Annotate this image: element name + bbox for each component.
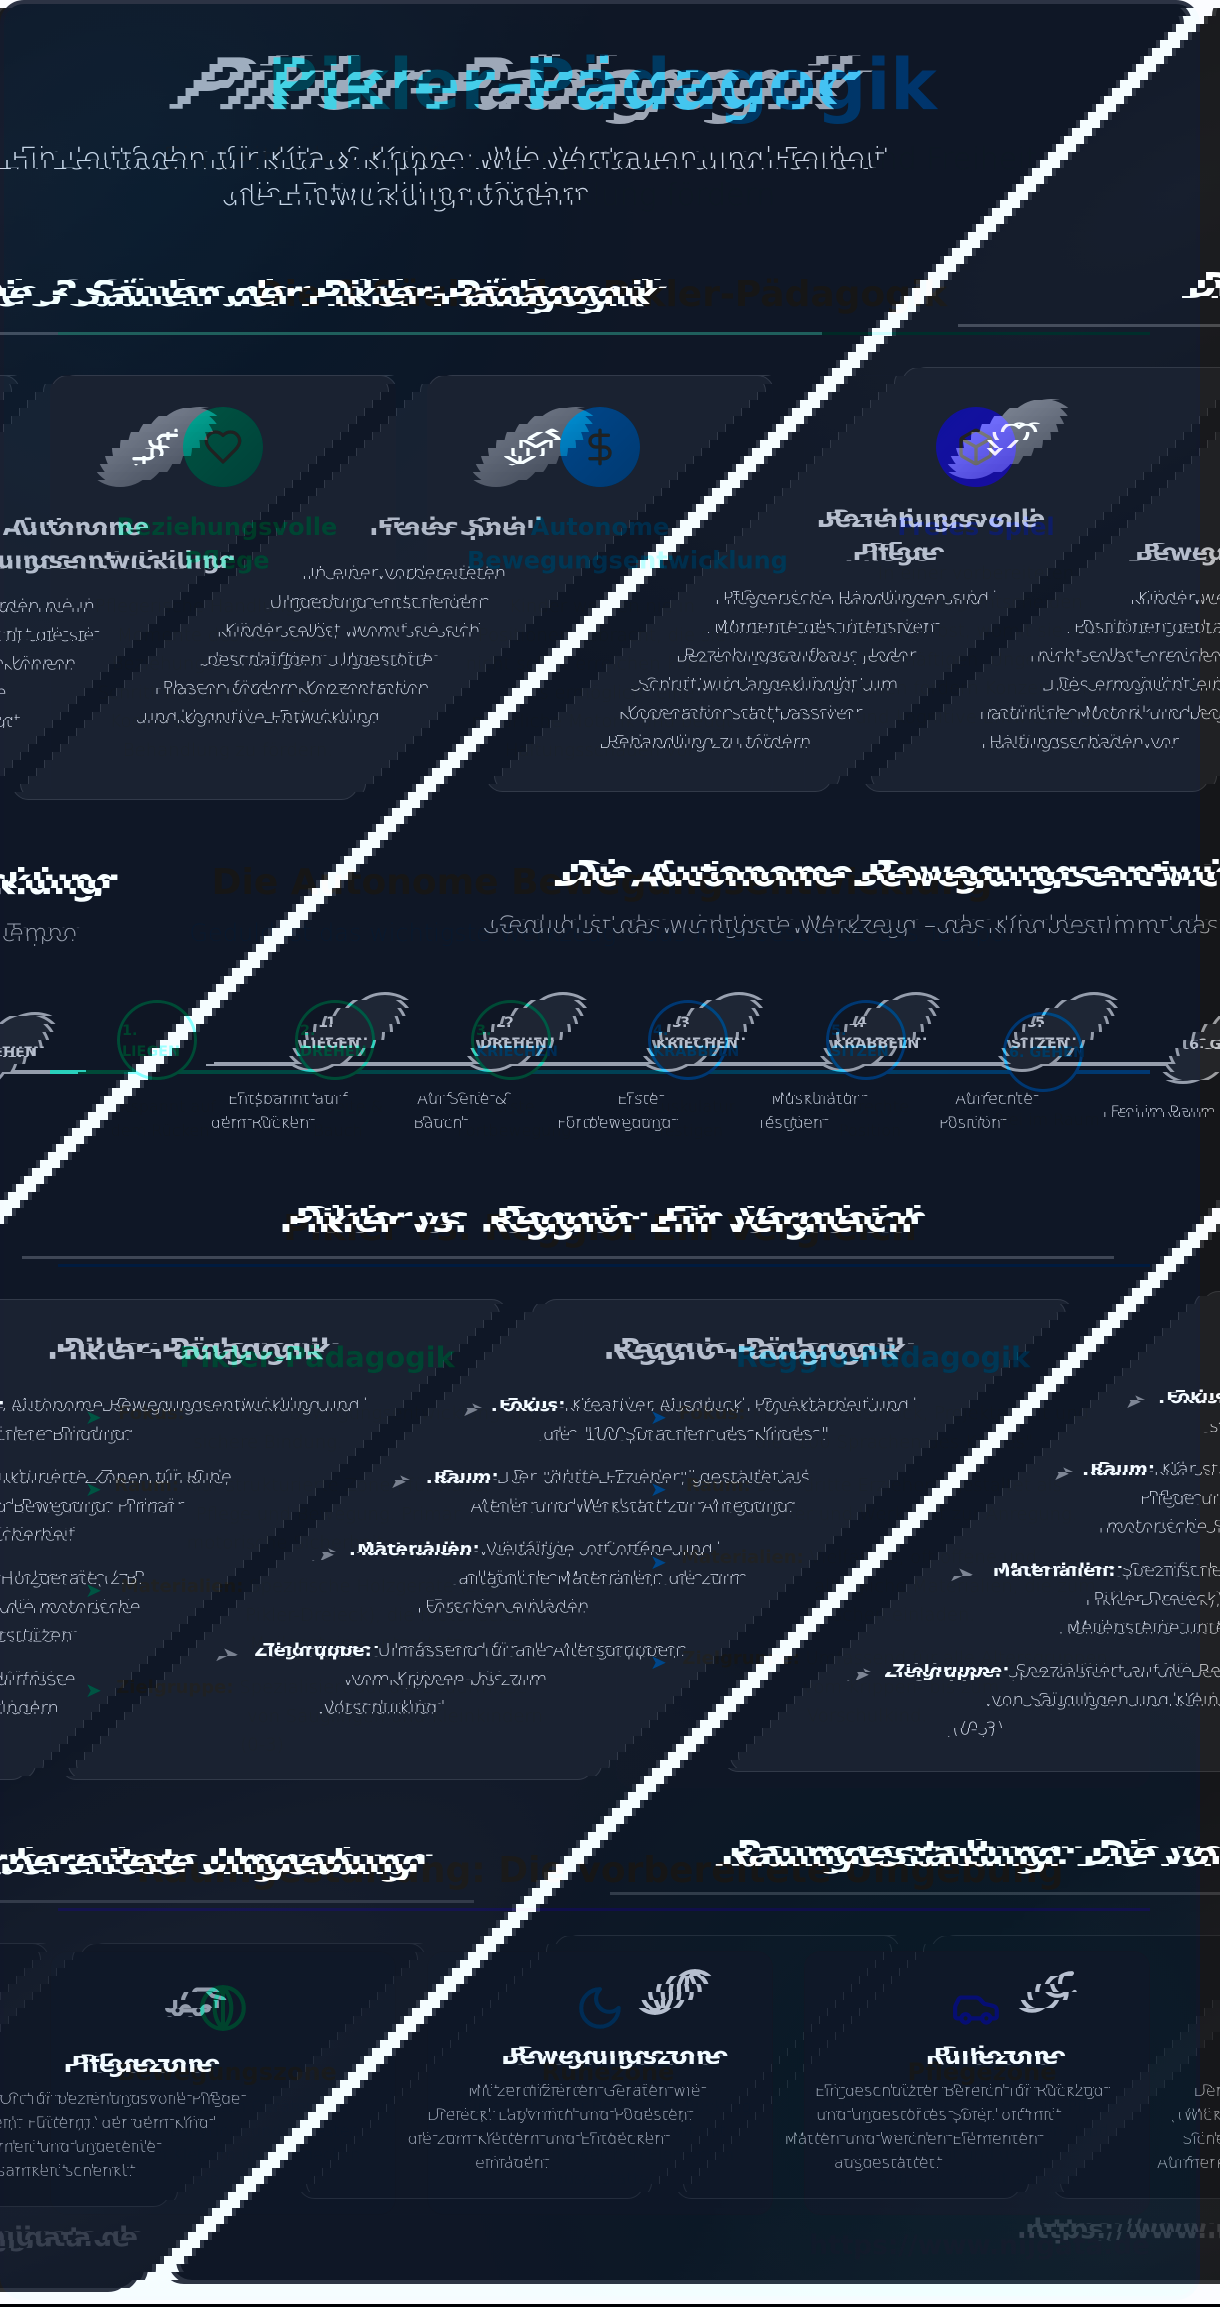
card text: Dies ermöglicht eine xyxy=(509,682,695,703)
card text: Haltungsschäden vor. xyxy=(505,740,699,761)
zone text: einladen. xyxy=(195,2169,269,2188)
heading: Vergleich xyxy=(58,1208,1150,1267)
icon: changing table xyxy=(955,1998,997,2023)
step 4: festigen xyxy=(659,1121,723,1140)
panel: Freies Spiel xyxy=(804,376,1150,800)
step 6: 6. GEHEN xyxy=(1009,1045,1085,1061)
list: Pikler xyxy=(85,1403,543,1756)
list: Pikler: sichere Bindung. xyxy=(193,1432,343,1453)
step 5: Position xyxy=(839,1121,901,1140)
panel: Autonome Bewegungsentwicklung xyxy=(428,376,788,800)
step 4: Muskulatur xyxy=(647,1097,736,1116)
list: Reggio: ➤ xyxy=(650,1477,667,1501)
list: Reggio xyxy=(650,1403,1114,1727)
zone text: Sicherheit und ungeteilte xyxy=(878,2145,1080,2164)
card heading xyxy=(117,513,337,575)
heading: Säulen xyxy=(58,274,1150,335)
card text xyxy=(466,596,738,761)
list: Pikler: ➤ xyxy=(85,1578,102,1602)
card text: und kognitive Entwicklung. xyxy=(855,707,1097,728)
icon: box xyxy=(936,407,1016,487)
card heading xyxy=(467,513,788,575)
zone text: die zum Klettern und Entdecken xyxy=(104,2145,360,2164)
list: Pikler: Materialien: Spezifische Holzgeräte (z.B. xyxy=(121,1576,499,1597)
card heading: Autonome xyxy=(531,513,669,541)
comparison heading: Reggio-Pädagogik xyxy=(736,1340,1031,1374)
zone text: Der Ort für beziehungsvolle Pflege xyxy=(842,2097,1116,2116)
list: Reggio: Forschen einladen. xyxy=(805,1605,975,1626)
step 6 xyxy=(994,1014,1100,1129)
list: Pikler: Fokus: Autonome Bewegungsentwicklung und xyxy=(118,1403,540,1424)
step 1: dem Rücken xyxy=(111,1121,209,1140)
list: Pikler: Zielgruppe: Spezialisiert auf die Bedürfnisse xyxy=(116,1677,528,1698)
heading: Bewegungsentwicklung: Die Autonome Bewegungsentwicklung xyxy=(212,862,992,903)
card heading: Bewegungsentwicklung xyxy=(467,547,788,575)
card text xyxy=(95,596,361,761)
list: Reggio: vom Krippen- bis zum xyxy=(803,1677,999,1698)
heading: Raumgestaltung: Raumgestaltung: Die vorbereitete Umgebung xyxy=(136,1850,1064,1891)
heading: Vergleich: Pikler vs. Reggio: Ein Vergleich xyxy=(283,1208,917,1249)
zone text: Aufmerksamkeit schenkt. xyxy=(877,2169,1081,2188)
list: Reggio: Zielgruppe: Umfassend für alle Altersgruppen, xyxy=(682,1648,1114,1669)
list: Reggio: ➤ xyxy=(650,1650,667,1674)
step 3 xyxy=(457,1002,571,1140)
list: Pikler: Pflege und Bewegung. Primär xyxy=(196,1504,461,1525)
step 1: 1. xyxy=(122,1023,137,1039)
list: Pikler: ➤ xyxy=(85,1477,102,1501)
zone text: Matten und weichen Elementen xyxy=(480,2145,734,2164)
step 4 xyxy=(647,1002,739,1140)
zone text: Ein geschützter Bereich für Rückzug xyxy=(463,2097,751,2116)
card text: Positionen gebracht, die sie xyxy=(478,625,726,646)
step 2: Bauch xyxy=(313,1121,363,1140)
zone text: ausgestattet. xyxy=(554,2169,660,2188)
list: Reggio: die "100 Sprachen des Kindes". xyxy=(755,1432,1039,1453)
heading: Raumgestaltung xyxy=(58,1850,1150,1911)
list: Pikler: (0-3) xyxy=(240,1735,284,1756)
card text xyxy=(842,563,1110,728)
footer url: https://www.nijgata.de xyxy=(809,2230,1150,2261)
list: Pikler: von Säuglingen und Kleinkindern xyxy=(247,1706,543,1727)
step 5: 5. xyxy=(831,1023,846,1039)
card text: Kinder werden nie in xyxy=(509,596,695,617)
card text: nicht selbst erreichen können. xyxy=(466,654,738,675)
list: Reggio: ➤ xyxy=(650,1550,667,1574)
step 1 xyxy=(104,1002,216,1140)
list: Reggio: Atelier und Werkstatt zur Anregung. xyxy=(754,1504,1078,1525)
card text: Phasen fördern Konzentration xyxy=(842,678,1110,699)
list: Pikler: ➤ xyxy=(85,1405,102,1429)
panel: Ruhezone xyxy=(428,1952,772,2214)
zone title: Ruhezone xyxy=(542,2058,674,2086)
panel: Beziehungsvolle Pflege xyxy=(50,376,396,800)
list: Pikler: Raum: Klar strukturierte Zonen für Ruhe, xyxy=(114,1475,490,1496)
icon: moon xyxy=(581,1989,619,2027)
zone title: Bewegungszone xyxy=(117,2058,337,2086)
card text: Beziehungsaufbaus. Jeder xyxy=(112,654,345,675)
list: Reggio: Raum: Der "dritte Erzieher", gestaltet als xyxy=(686,1475,1062,1496)
card text: In einer vorbereiteten xyxy=(878,563,1074,584)
subtitle xyxy=(163,142,1037,213)
list: Reggio: alltägliche Materialien, die zum xyxy=(814,1576,1096,1597)
card heading: Beziehungsvolle xyxy=(117,513,337,541)
zone text xyxy=(842,2097,1116,2188)
step 3: Fortbewegung xyxy=(457,1121,571,1140)
list: Reggio: ➤ xyxy=(650,1405,667,1429)
icon: heart xyxy=(183,407,263,487)
step 4: 4. xyxy=(653,1023,668,1039)
icon: movement xyxy=(560,407,640,487)
subtitle: die Entwicklung fördern xyxy=(421,178,775,213)
step 2: DREHEN xyxy=(300,1044,367,1060)
panel: Pflegezone xyxy=(804,1952,1150,2214)
comparison heading: Pikler-Pädagogik xyxy=(179,1340,456,1374)
card text: Pflegerische Handlungen sind xyxy=(95,596,361,617)
list: Pikler: Meilensteine unterstützen. xyxy=(250,1634,490,1655)
card text: Behandlung zu fördern. xyxy=(123,740,333,761)
card text: Kooperation statt passiver xyxy=(110,711,347,732)
card heading: Freies Spiel xyxy=(897,513,1055,541)
panel: Pikler xyxy=(50,1308,584,1788)
step 2 xyxy=(293,1002,383,1140)
step 3: Erste xyxy=(493,1097,535,1116)
step 5 xyxy=(828,1002,909,1140)
timeline xyxy=(50,1002,1150,1140)
card text: natürliche Motorik und beugt xyxy=(471,711,733,732)
card text: Momente des intensiven xyxy=(117,625,339,646)
list: Reggio: Fokus: Kreativer Ausdruck, Projektarbeit und xyxy=(679,1403,1089,1424)
list: Pikler: ➤ xyxy=(85,1678,102,1702)
step 1: Entspannt auf xyxy=(104,1097,216,1116)
step 2: 2. xyxy=(300,1023,315,1039)
zone text: Mit zertifizierten Geräten wie xyxy=(115,2097,349,2116)
step 5: Aufrechte xyxy=(831,1097,909,1116)
title: Pikler-Pädagogik xyxy=(267,44,938,126)
list: Pikler: motorische Sicherheit. xyxy=(187,1533,389,1554)
zone text: Dreieck, Labyrinth und Podesten, xyxy=(99,2121,365,2140)
step 2: Auf Seite & xyxy=(293,1097,383,1116)
card text: Kinder selbst, womit sie sich xyxy=(848,621,1104,642)
card text: Umgebung entscheiden xyxy=(869,592,1083,613)
list: Reggio: Materialien: Vielfältige, oft offene und xyxy=(681,1547,1037,1568)
section subtitle: Geduld ist das wichtigste Werkzeug – das Kind bestimmt das Tempo. xyxy=(189,919,1013,947)
list: Reggio: Vorschulkind. xyxy=(807,1706,927,1727)
panel: Reggio xyxy=(616,1308,1150,1788)
card heading: Pflege xyxy=(184,547,270,575)
zone text xyxy=(463,2097,751,2188)
zone text xyxy=(99,2097,365,2188)
step 6: Frei im Raum xyxy=(994,1110,1100,1129)
zone text: (Wickeln, Füttern), der dem Kind xyxy=(849,2121,1109,2140)
panel: Bewegungszone xyxy=(50,1952,396,2214)
step 4: KRABBELN xyxy=(653,1044,739,1060)
card text: beschäftigen. Ungestörte xyxy=(863,649,1089,670)
zone text: und ungestörtes Spiel, oft mit xyxy=(488,2121,726,2140)
icon: globe xyxy=(202,1987,244,2029)
subtitle: Ein Leitfaden für Kita & Krippe: Wie Vertrauen und Freiheit xyxy=(163,142,1037,177)
zone title: Pflegezone xyxy=(908,2058,1056,2086)
heading: Säulen: Die 3 Säulen der Pikler-Pädagogik xyxy=(255,274,948,315)
step 1: LIEGEN xyxy=(122,1044,180,1060)
step 5: SITZEN xyxy=(831,1044,889,1060)
card text: Schritt wird angekündigt, um xyxy=(98,682,358,703)
step 3: KRIECHEN xyxy=(476,1044,558,1060)
step 3: 3. xyxy=(476,1023,491,1039)
list: Pikler: Pikler-Dreieck), die motorische xyxy=(245,1605,521,1626)
